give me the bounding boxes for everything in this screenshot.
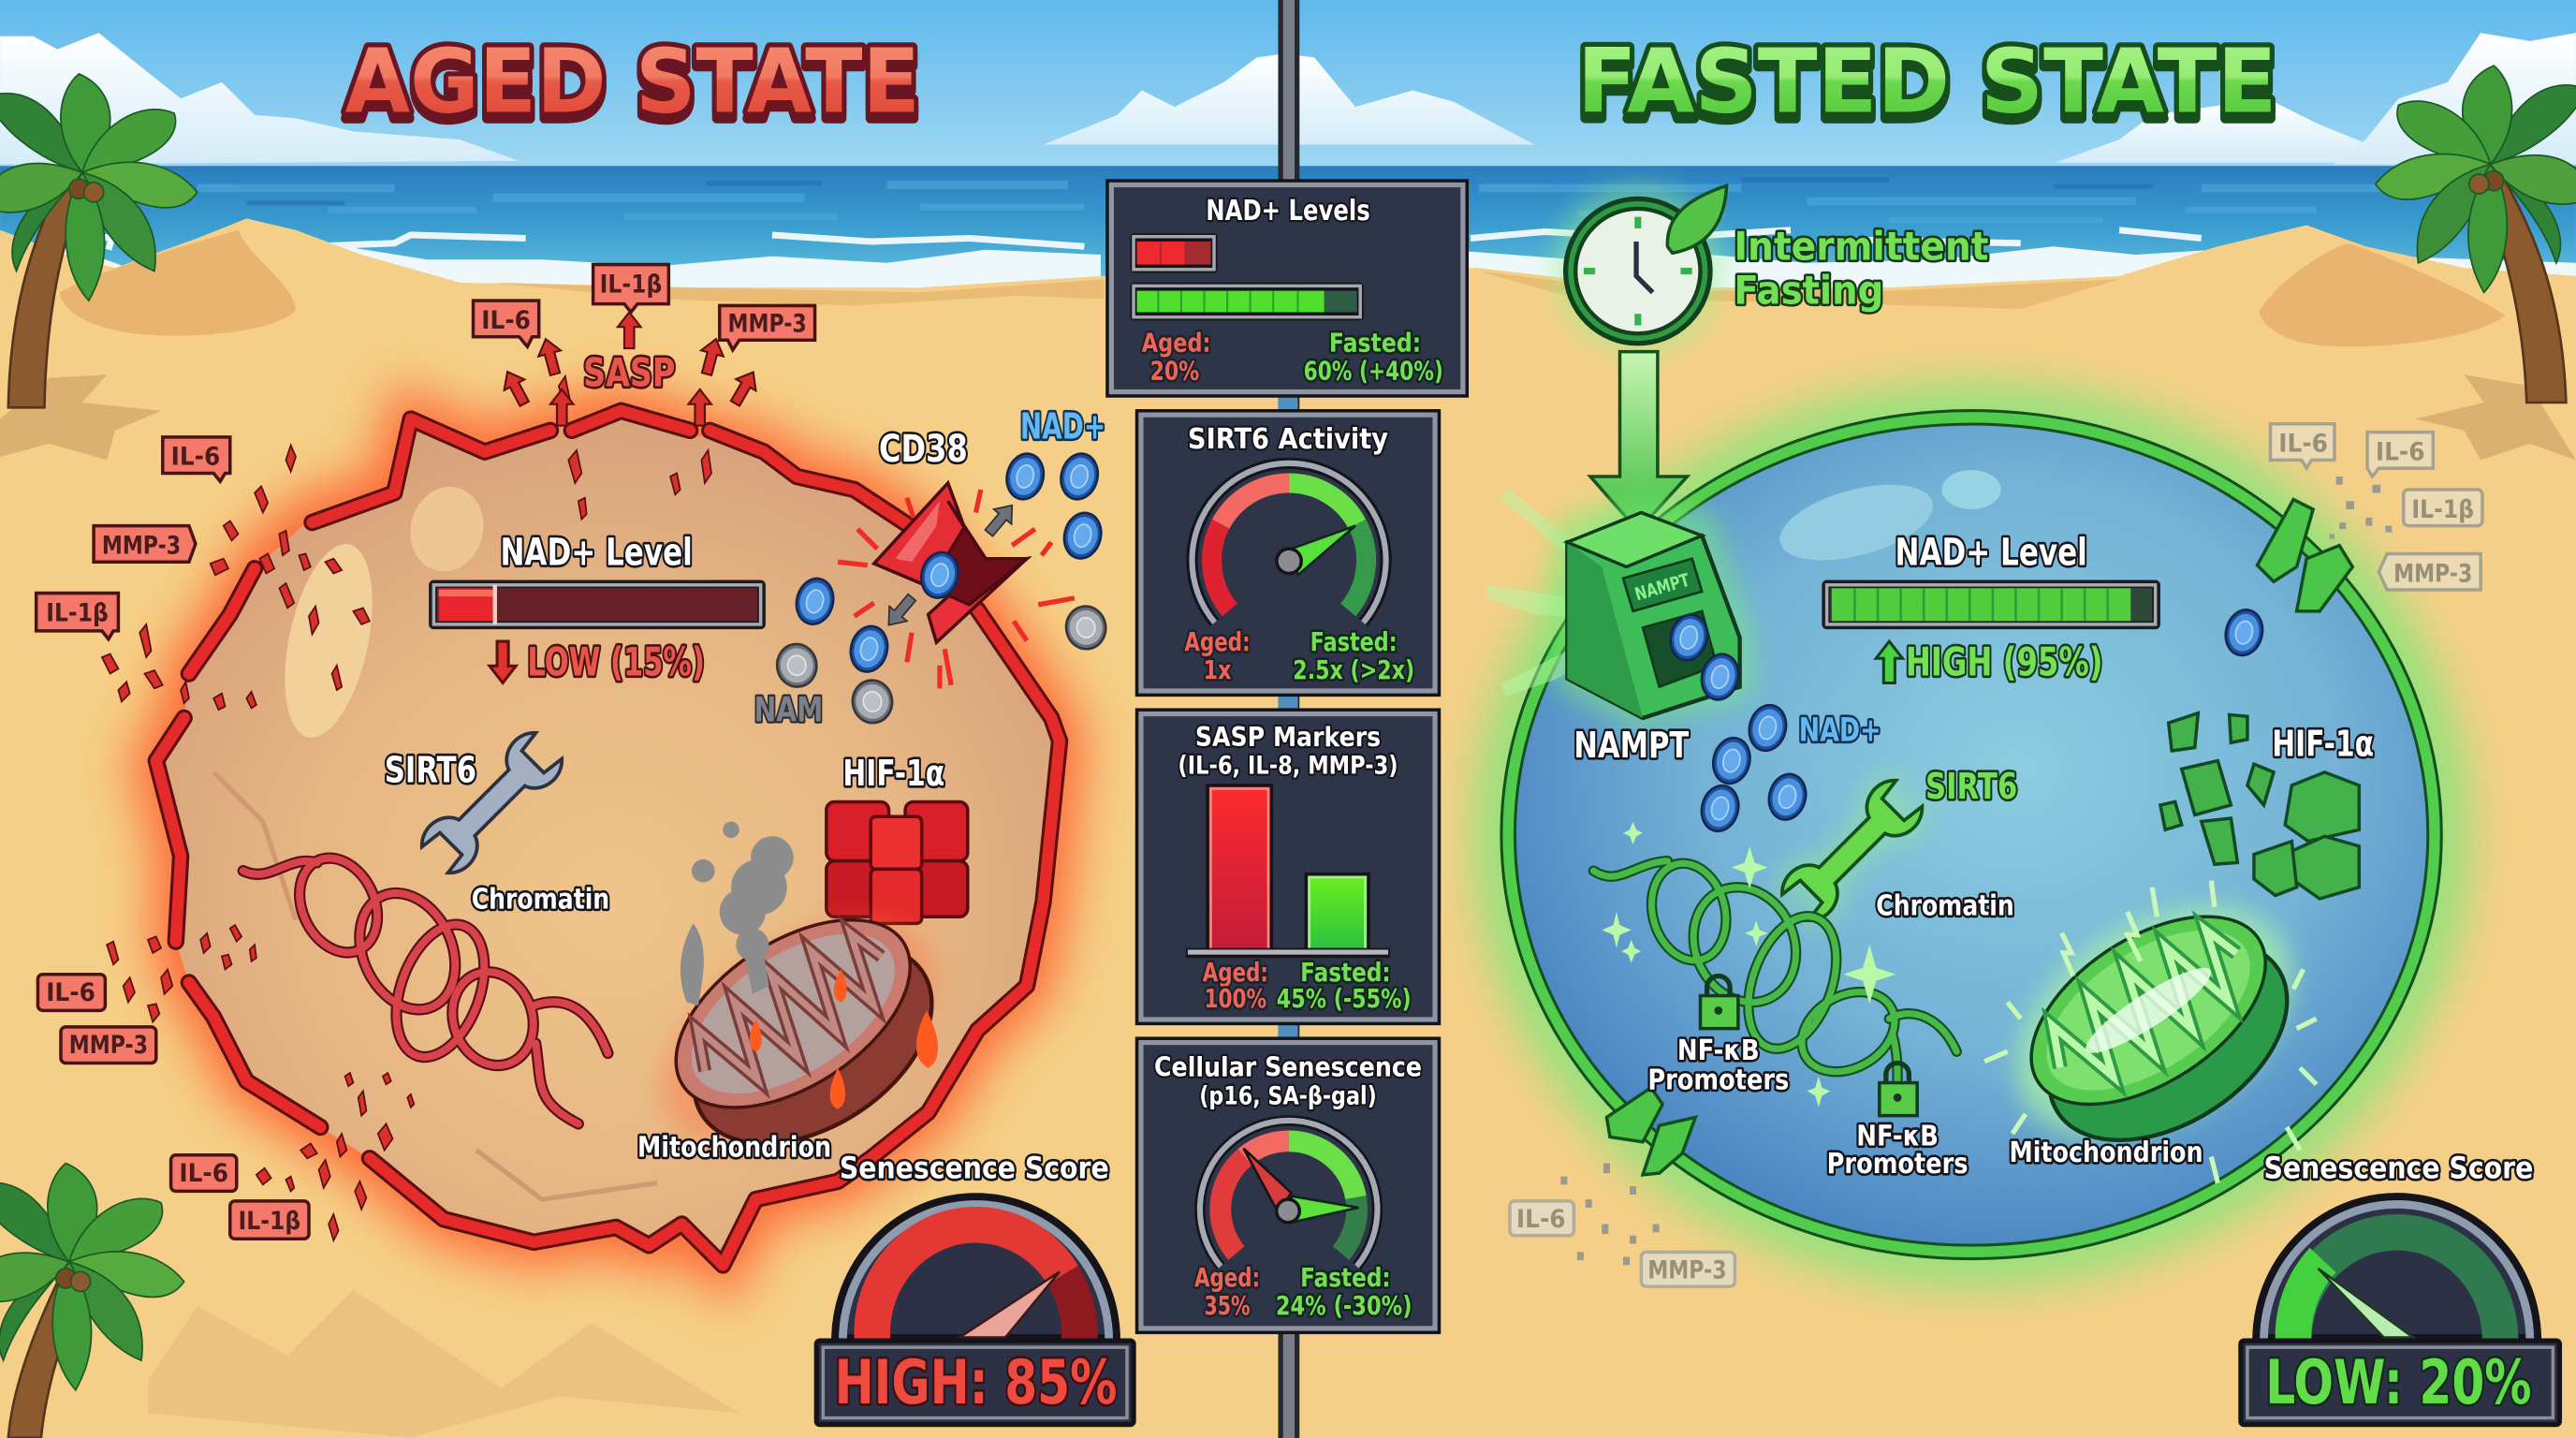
fasted value: 60% (+40%) (1304, 357, 1443, 386)
readout (816, 1341, 1134, 1425)
membrane segments (156, 411, 1060, 1265)
label: IL-6 top: IL-6 (481, 307, 531, 335)
NAD+ label: NAD+ (1799, 712, 1881, 750)
aged value: 20% (1150, 357, 1199, 386)
status (1876, 638, 2102, 684)
dial (838, 1199, 1114, 1341)
heading: NAD+ Level (1895, 531, 2087, 575)
label (1734, 223, 1989, 314)
membrane fragments (102, 376, 711, 1240)
label: IL-6 lower (1510, 1201, 1573, 1236)
panel title: (IL-6, IL-8, MMP-3) (1178, 753, 1398, 781)
NF-κB promoter lock: right: Promoters (1827, 1148, 1969, 1181)
dispensed coins (1666, 610, 1743, 704)
label: MMP-3 right: MMP-3 (2393, 560, 2472, 588)
label: IL-1β top: IL-1β (600, 271, 662, 299)
heading: NAD+ Level (500, 531, 693, 575)
center divider (1278, 0, 1299, 1438)
cytokine labels: fasted side, faded (1510, 424, 2482, 1286)
machine screen: NAMPT (1632, 569, 1692, 605)
senescence score gauge: fasted (2241, 1152, 2559, 1425)
panel title: Cellular Senescence (1154, 1052, 1422, 1083)
senescence score gauge: aged (816, 1152, 1134, 1425)
heading: Senescence Score (840, 1152, 1109, 1185)
panel title (1154, 1052, 1422, 1110)
clock face (1566, 198, 1710, 344)
panel: cellular senescence (1135, 1036, 1441, 1334)
label: Intermittent (1734, 223, 1989, 269)
label: IL-6 upper: IL-6 (2278, 431, 2328, 459)
label: MMP-3 lower left: MMP-3 (69, 1032, 148, 1060)
palm tree: top left (0, 74, 198, 407)
panel title: NAD+ Levels (1206, 195, 1370, 227)
label: IL-6 right (2367, 433, 2433, 477)
fasted value: Fasted: (1310, 628, 1398, 657)
panel title: (p16, SA-β-gal) (1199, 1082, 1377, 1110)
mitochondrion label: Mitochondrion (637, 1132, 831, 1165)
label: IL-6 bottom (171, 1155, 237, 1191)
energy sparks (1984, 881, 2317, 1183)
panel: NAD+ levels (1105, 179, 1469, 398)
label: MMP-3 lower: MMP-3 (1647, 1256, 1727, 1284)
aged value (1194, 1264, 1260, 1321)
aged value: Aged: (1184, 628, 1251, 657)
NAMPT machine (1486, 493, 1743, 767)
cell: fasted, healthy membrane (1505, 414, 2438, 1265)
panel title: SASP Markers (1195, 722, 1381, 753)
label: IL-1β left (37, 594, 118, 639)
status: LOW (15%) (527, 638, 705, 684)
pore: upper right (2257, 500, 2352, 611)
NAD+ level meter: fasted (1822, 531, 2160, 684)
intermittent fasting clock (1553, 185, 1989, 357)
status: HIGH (95%) (1906, 638, 2102, 684)
mitochondrion label: Mitochondrion (2009, 1137, 2203, 1169)
SASP release arrows (497, 312, 763, 426)
label: MMP-3 top: MMP-3 (728, 311, 807, 339)
bar chart (1186, 785, 1390, 958)
label: IL-6 lower left: IL-6 (46, 979, 95, 1007)
SASP heading: SASP (583, 349, 675, 395)
fasted value (1304, 330, 1443, 386)
mitochondrion: fasted and energised (1975, 859, 2333, 1184)
aged value (1184, 628, 1251, 685)
label: IL-6 left (163, 437, 230, 481)
fasted value: 45% (-55%) (1277, 985, 1412, 1014)
smoke (681, 822, 794, 1005)
arrow: fasting to NAMPT (1590, 352, 1687, 531)
leaf (1667, 185, 1727, 253)
label: IL-1β top (593, 265, 668, 312)
heading: Senescence Score (2263, 1152, 2533, 1185)
title: fasted state: FASTED STATE (1577, 30, 2277, 133)
pore: lower left (1606, 1088, 1695, 1175)
label: IL-6 left: IL-6 (171, 444, 220, 472)
NAM coins (774, 604, 1108, 726)
flames (750, 969, 938, 1109)
fasted value: 2.5x (>2x) (1293, 656, 1414, 685)
label: IL-6 lower: IL-6 (1516, 1206, 1566, 1234)
SIRT6 wrench: fasted (1776, 766, 2017, 927)
palm tree: top right (2376, 66, 2576, 403)
NAM label: NAM (754, 689, 823, 729)
CD38 label: CD38 (879, 427, 968, 471)
NAD+ coins (792, 449, 1105, 676)
fasted value (1276, 1264, 1412, 1321)
SIRT6 label: SIRT6 (1925, 766, 2017, 808)
fasted bar (1131, 283, 1364, 320)
CD38 crystal (874, 483, 1027, 642)
NF-κB promoter lock: left: NF-κB (1677, 1034, 1760, 1067)
HIF-1α label: HIF-1α (842, 753, 944, 795)
SIRT6 wrench: aged (385, 726, 568, 879)
readout: HIGH: 85% (835, 1348, 1117, 1418)
panel title: SIRT6 Activity (1188, 423, 1388, 456)
label: Fasting (1734, 268, 1883, 314)
cell: aged, damaged membrane (102, 312, 1060, 1265)
HIF-1α blocks: aged (827, 753, 968, 923)
panel: SIRT6 activity (1135, 409, 1441, 697)
panel title (1178, 722, 1398, 781)
aged value (1142, 330, 1211, 386)
chromatin label: Chromatin (1876, 890, 2014, 923)
released cytokine dots (1560, 477, 2392, 1265)
palm tree: bottom left (0, 1164, 184, 1438)
label: IL-1β left: IL-1β (46, 599, 109, 627)
fasted value: 24% (-30%) (1276, 1292, 1412, 1321)
label: MMP-3 left: MMP-3 (102, 532, 181, 560)
aged value: Aged: (1194, 1264, 1260, 1293)
bar (1822, 580, 2160, 629)
NF-κB promoter lock: left: Promoters (1647, 1064, 1789, 1097)
label: IL-6 upper (2271, 424, 2334, 468)
label: IL-6 lower left (37, 975, 105, 1010)
label: IL-1β right (2404, 490, 2482, 526)
label: MMP-3 top (720, 305, 815, 350)
chromatin label: Chromatin (472, 884, 609, 917)
aged value: Aged: (1142, 330, 1211, 359)
fasted value (1293, 628, 1414, 685)
aged value: 1x (1204, 656, 1232, 685)
bar (429, 580, 766, 629)
gauge (1193, 463, 1386, 623)
chromatin: aged (243, 845, 609, 1123)
aged value: 100% (1204, 985, 1266, 1014)
title: aged state: AGED STATE (345, 30, 920, 133)
cytokine labels: aged side (37, 265, 815, 1239)
panel: SASP markers (1135, 708, 1441, 1025)
NAD+ coins: fasted (1697, 606, 2267, 835)
CD38 enzyme and NAD+ to NAM conversion (754, 406, 1108, 729)
label: IL-1β bottom (230, 1201, 309, 1239)
aged value: 35% (1204, 1292, 1251, 1321)
NF-κB promoter lock: right: NF-κB (1856, 1120, 1939, 1152)
sparkles (1602, 822, 1895, 1108)
label: IL-1β right: IL-1β (2411, 496, 2474, 524)
fasted value: Fasted: (1300, 959, 1391, 988)
conversion arrows (880, 498, 1021, 633)
fasted value: Fasted: (1329, 330, 1421, 359)
spark rays (838, 490, 1075, 688)
fasted value: Fasted: (1300, 1264, 1391, 1293)
aged bar (1131, 233, 1218, 272)
label: IL-1β bottom: IL-1β (239, 1208, 300, 1236)
NAD+ label: NAD+ (1020, 406, 1105, 448)
NAMPT label: NAMPT (1573, 725, 1690, 767)
machine screen (1623, 559, 1702, 611)
NAD+ level meter: aged (429, 531, 766, 684)
status (490, 638, 705, 684)
aged value (1203, 959, 1268, 1014)
HIF-1α degraded fragments: fasted (2160, 713, 2374, 899)
label: MMP-3 lower left (61, 1027, 156, 1064)
NF-κB promoter lock: right (1827, 1064, 1969, 1181)
HIF-1α label: HIF-1α (2272, 723, 2374, 765)
label: IL-6 right: IL-6 (2376, 438, 2424, 466)
label: MMP-3 right (2378, 553, 2481, 590)
label: IL-6 bottom: IL-6 (179, 1160, 228, 1188)
label: IL-6 top (474, 301, 539, 346)
aged value: Aged: (1203, 959, 1268, 988)
SIRT6 label: SIRT6 (385, 749, 476, 791)
dial (2259, 1199, 2535, 1341)
NF-κB promoter lock: left (1647, 976, 1789, 1097)
mitochondrion: aged and burning (623, 822, 973, 1191)
gauge (1200, 1121, 1377, 1267)
fasted value (1277, 959, 1412, 1014)
chromatin: fasted (1593, 822, 2014, 1108)
